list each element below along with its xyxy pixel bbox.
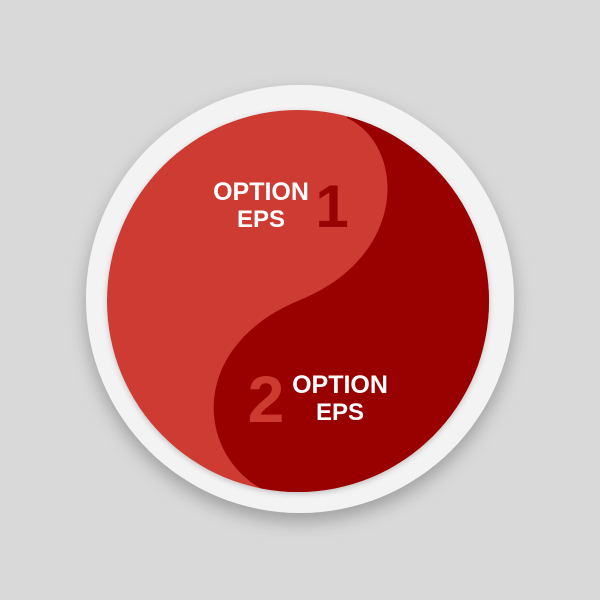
option 2 label: OPTION (292, 371, 388, 399)
white ring (86, 85, 514, 513)
option 2 label: EPS (316, 399, 364, 426)
red circle (104, 110, 492, 496)
option 1 label: 1 (315, 173, 349, 240)
option 2 label (248, 362, 388, 436)
light red half (107, 110, 489, 492)
option 2 label: 2 (248, 362, 284, 436)
option 1 label (213, 173, 349, 240)
dark red half (214, 116, 489, 492)
option 1 label: EPS (237, 206, 285, 233)
infographic: yin-yang two options (76, 84, 524, 530)
option 1 label: OPTION (213, 178, 309, 206)
